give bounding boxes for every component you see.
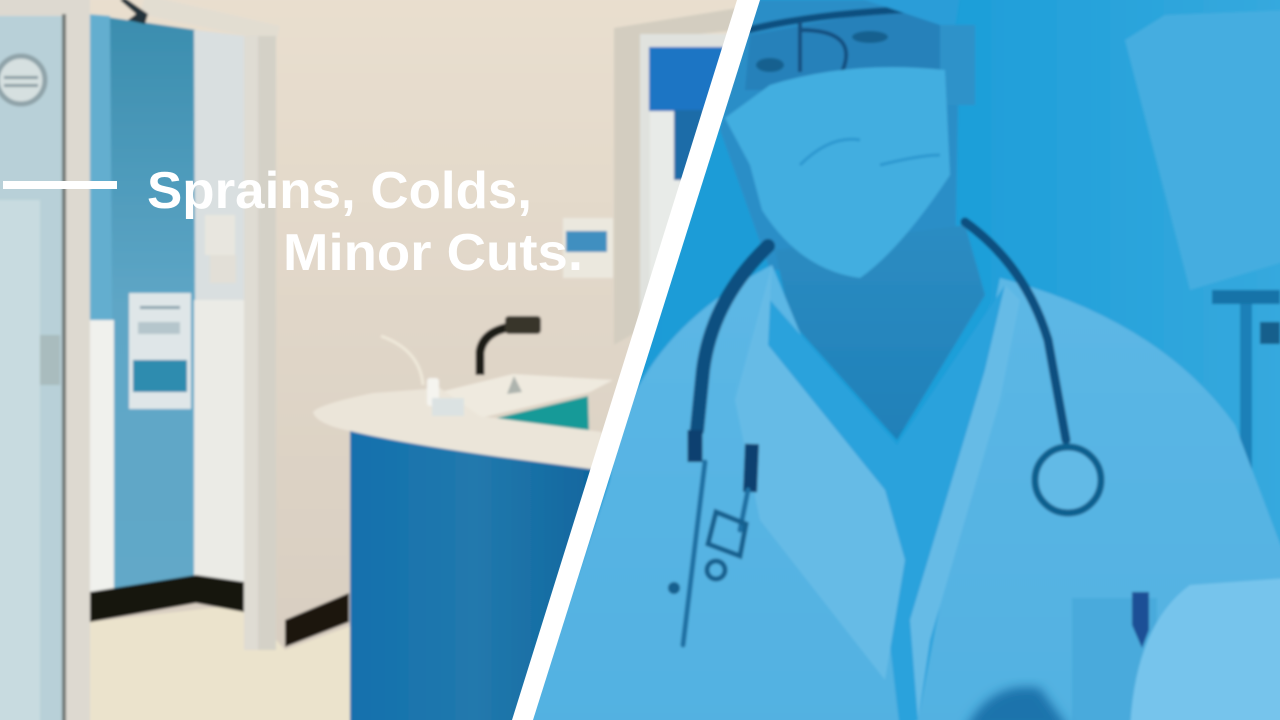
background equipment [1060, 0, 1280, 590]
shadow at coat hem [965, 687, 1070, 720]
panel: clinic photo [0, 0, 790, 720]
glass door left [0, 0, 148, 720]
diagonal divider [512, 0, 760, 720]
title: first line: Sprains, Colds, [147, 162, 532, 220]
mask [725, 67, 950, 278]
title: second line: Minor Cuts. [283, 224, 583, 282]
desk items [381, 316, 541, 416]
back doorway [614, 8, 740, 345]
reception desk [313, 374, 613, 720]
neck [775, 225, 985, 440]
door frame [140, 0, 280, 650]
accent line [3, 181, 117, 189]
head and goggles [720, 0, 975, 270]
lab coat [525, 265, 1280, 720]
poster on wall [129, 293, 191, 409]
wall panel [563, 218, 613, 278]
stethoscope [668, 222, 1101, 645]
panel: doctor photo with blue overlay [525, 0, 1280, 720]
baseboard [285, 593, 349, 647]
floor [80, 604, 350, 720]
inner corridor wall [86, 14, 246, 622]
